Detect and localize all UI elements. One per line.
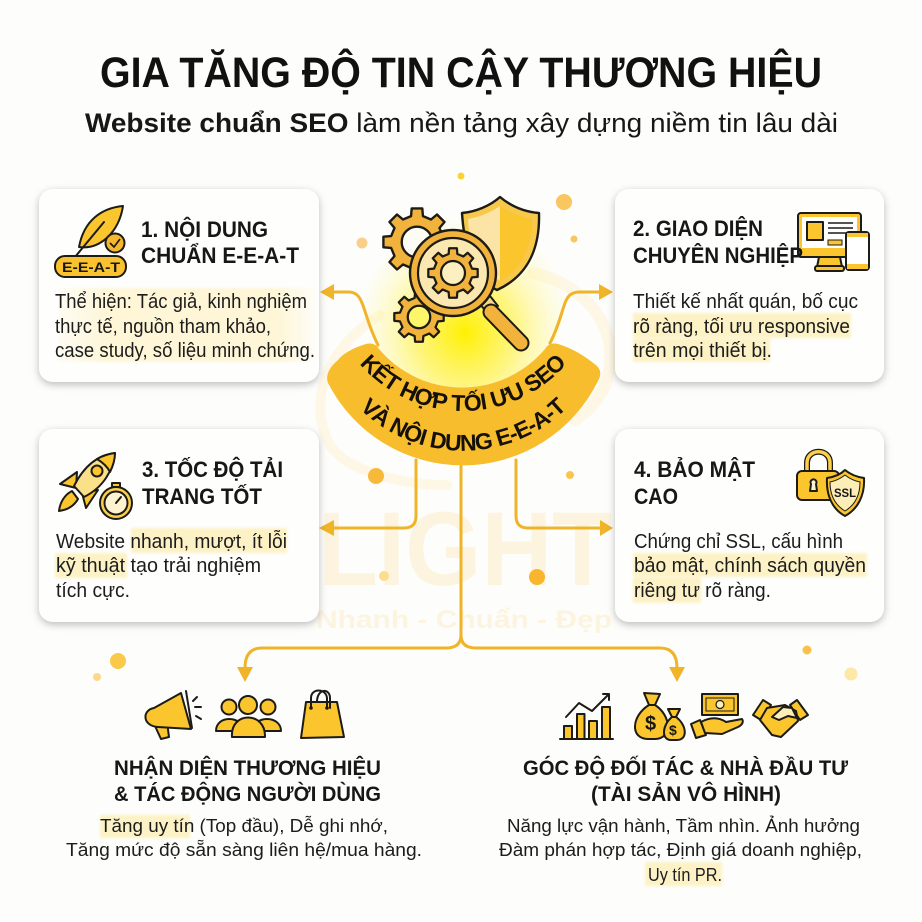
card 1 heading: 1. NỘI DUNG xyxy=(141,217,268,242)
investor body: Uy tín PR. xyxy=(648,865,722,885)
arrow: center to brand section xyxy=(237,460,461,682)
watermark logo: Nhanh - Chuẩn - Đẹp xyxy=(316,606,612,634)
card 3 heading: 3. TỐC ĐỘ TẢI xyxy=(142,456,283,482)
icon: megaphone xyxy=(145,691,201,739)
card 2 body xyxy=(633,291,858,362)
banner text line 2: VÀ NỘI DUNG E-E-A-T xyxy=(364,396,564,451)
panel: card 4 security xyxy=(615,429,884,622)
watermark logo: LIGHT xyxy=(318,491,612,608)
brand heading: & TÁC ĐỘNG NGƯỜI DÙNG xyxy=(114,781,381,806)
card 1 body: thực tế, nguồn tham khảo, xyxy=(55,316,271,338)
icon: small gear xyxy=(394,292,444,342)
panel: card 3 page speed xyxy=(39,429,319,622)
card 4 heading: 4. BẢO MẬT xyxy=(634,457,756,482)
watermark swirl xyxy=(320,273,610,485)
central glow xyxy=(365,190,565,400)
arrow: center to card 2 xyxy=(550,284,613,343)
icon: shield xyxy=(462,197,539,290)
central icon: gears, shield and magnifier xyxy=(383,197,539,343)
card 1 body: Thể hiện: Tác giả, kinh nghiệm xyxy=(55,291,307,313)
card 2 heading: 2. GIAO DIỆN xyxy=(633,216,763,241)
brand body: Tăng uy tín (Top đầu), Dễ ghi nhớ, xyxy=(100,815,388,836)
brand heading xyxy=(114,755,381,806)
section: partners and investors xyxy=(499,693,862,886)
central curved banner xyxy=(327,344,600,466)
icon: padlock and SSL shield: SSL xyxy=(834,488,856,500)
arrow: center to card 1 xyxy=(320,284,378,345)
card 4 body: bảo mật, chính sách quyền xyxy=(634,555,866,577)
icon: handshake xyxy=(753,700,808,737)
icon: padlock and SSL shield xyxy=(797,452,864,516)
icon: growth chart xyxy=(560,694,613,739)
card 4 body: riêng tư rõ ràng. xyxy=(634,580,771,602)
card 3 heading xyxy=(142,456,283,509)
panel: card 1 content quality xyxy=(39,189,319,382)
icon: rocket and stopwatch xyxy=(59,453,132,519)
investor body: Đàm phán hợp tác, Định giá doanh nghiệp, xyxy=(499,840,862,860)
icon: cash in hand xyxy=(691,694,743,738)
arrow: center to investor section xyxy=(461,635,685,682)
investor body: Năng lực vận hành, Tầm nhìn. Ảnh hưởng xyxy=(507,815,860,836)
card 2 heading: CHUYÊN NGHIỆP xyxy=(633,243,803,268)
icon: magnifier xyxy=(410,230,521,343)
icon: money bags: $ xyxy=(669,722,677,738)
card 2 body: Thiết kế nhất quán, bố cục xyxy=(633,291,858,313)
card 2 heading xyxy=(633,216,803,268)
card 2 body: rõ ràng, tối ưu responsive xyxy=(633,316,850,338)
card 4 body xyxy=(634,531,866,602)
decorative dots xyxy=(93,172,858,681)
investor heading xyxy=(523,754,848,806)
investor heading: GÓC ĐỘ ĐỐI TÁC & NHÀ ĐẦU TƯ xyxy=(523,754,848,780)
icon: feather and E-E-A-T badge xyxy=(55,206,126,277)
card 1 body: case study, số liệu minh chứng. xyxy=(55,340,315,362)
card 3 heading: TRANG TỐT xyxy=(142,483,263,509)
banner text line 1: KẾT HỢP TỐI ƯU SEO xyxy=(360,354,564,411)
card 2 body: trên mọi thiết bị. xyxy=(633,340,772,362)
arrow: center to card 3 xyxy=(319,460,416,536)
icon: monitor and phone xyxy=(798,213,869,271)
title: GIA TĂNG ĐỘ TIN CẬY THƯƠNG HIỆU xyxy=(100,48,822,97)
brand heading: NHẬN DIỆN THƯƠNG HIỆU xyxy=(114,755,381,780)
icon: money bags: $ xyxy=(645,713,656,735)
investor heading: (TÀI SẢN VÔ HÌNH) xyxy=(591,781,781,806)
card 3 body: kỹ thuật tạo trải nghiệm xyxy=(56,555,261,577)
card 4 heading: CAO xyxy=(634,484,678,509)
card 4 body: Chứng chỉ SSL, cấu hình xyxy=(634,531,843,553)
card 3 body: Website nhanh, mượt, ít lỗi xyxy=(56,530,287,553)
icon: money bags xyxy=(635,693,685,740)
investor body xyxy=(499,815,862,886)
subtitle: Website chuẩn SEO làm nền tảng xây dựng niềm tin lâu dài xyxy=(85,108,838,138)
section: brand recognition xyxy=(66,690,422,860)
card 1 heading: CHUẨN E-E-A-T xyxy=(141,243,300,268)
card 1 body xyxy=(55,291,315,362)
card 3 body xyxy=(56,530,287,602)
icon: feather and E-E-A-T badge: E-E-A-T xyxy=(62,259,121,275)
icon: shopping bag xyxy=(301,690,344,738)
card 4 heading xyxy=(634,457,756,509)
card 3 body: tích cực. xyxy=(56,580,130,602)
icon: people xyxy=(216,696,281,737)
icon: large gear xyxy=(383,208,451,276)
card 1 heading xyxy=(141,217,300,268)
arrow: center to card 4 xyxy=(516,460,613,536)
brand body xyxy=(66,815,422,860)
panel: card 2 professional design xyxy=(615,189,884,382)
brand body: Tăng mức độ sẵn sàng liên hệ/mua hàng. xyxy=(66,840,422,860)
